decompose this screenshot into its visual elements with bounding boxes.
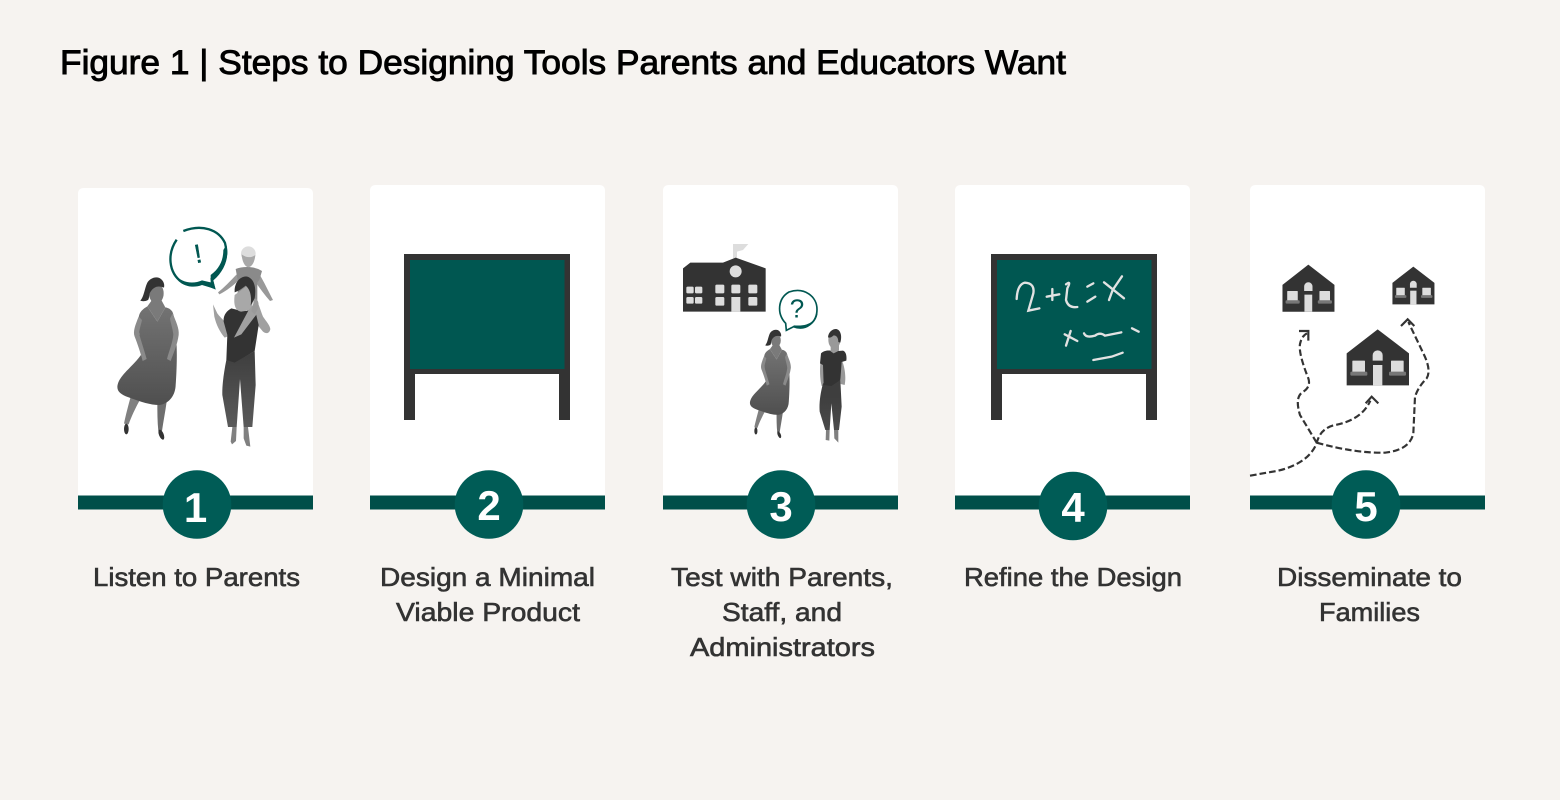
- label: Disseminate to: [1277, 562, 1462, 592]
- label: Administrators: [690, 632, 875, 662]
- label: [380, 562, 595, 627]
- step number 4: 4: [1061, 484, 1085, 531]
- panel: step 2 minimal viable product: [370, 185, 605, 627]
- label: Refine the Design: [964, 562, 1182, 592]
- step number 3: 3: [769, 483, 793, 530]
- progress bar: [1250, 496, 1485, 510]
- dashed arrows to houses: [1250, 319, 1429, 476]
- illustration: parents talking: [117, 246, 273, 447]
- card: [78, 188, 313, 500]
- card: [663, 185, 898, 500]
- illustration: parent: [750, 330, 791, 439]
- label: Listen to Parents: [93, 562, 300, 592]
- step number 5: 5: [1354, 483, 1378, 530]
- step number 2: [455, 470, 523, 539]
- illustration: board with chalk writing: [991, 254, 1157, 420]
- illustration: staff member: [819, 329, 847, 443]
- label: Staff, and: [722, 597, 842, 627]
- illustration: blank board: [404, 254, 570, 420]
- step number 4: [1039, 472, 1107, 540]
- step number 1: 1: [184, 484, 207, 531]
- title: Figure 1 | Steps to Designing Tools Parents and Educators Want: [60, 44, 1067, 82]
- progress bar: [955, 496, 1190, 510]
- panel: step 1 listen to parents: [78, 188, 313, 592]
- progress bar: [370, 496, 605, 510]
- progress bar: [78, 496, 313, 510]
- speech bubble: exclamation: !: [192, 238, 204, 269]
- panel: step 4 refine the design: [955, 185, 1190, 592]
- speech bubble: question: [780, 291, 818, 330]
- card: [955, 185, 1190, 500]
- progress bar: [663, 496, 898, 510]
- card: [1250, 185, 1485, 500]
- step number 1: [163, 470, 231, 539]
- step number 5: [1332, 470, 1400, 539]
- speech bubble: question: ?: [790, 293, 804, 323]
- label: Design a Minimal: [380, 562, 595, 592]
- step number 3: [747, 470, 815, 539]
- label: Test with Parents,: [671, 562, 893, 592]
- illustration: school building: [683, 244, 766, 312]
- panel: step 5 disseminate to families: [1250, 185, 1485, 627]
- chalk marks: [1017, 276, 1139, 360]
- step number 2: 2: [477, 482, 501, 529]
- illustration: three houses: [1282, 265, 1434, 385]
- label: Viable Product: [396, 597, 581, 627]
- label: [671, 562, 893, 662]
- label: [1277, 562, 1462, 627]
- card: [370, 185, 605, 500]
- speech bubble: exclamation: [170, 228, 227, 289]
- label: Families: [1319, 597, 1420, 627]
- panel: step 3 test with parents staff administrators: [663, 185, 898, 662]
